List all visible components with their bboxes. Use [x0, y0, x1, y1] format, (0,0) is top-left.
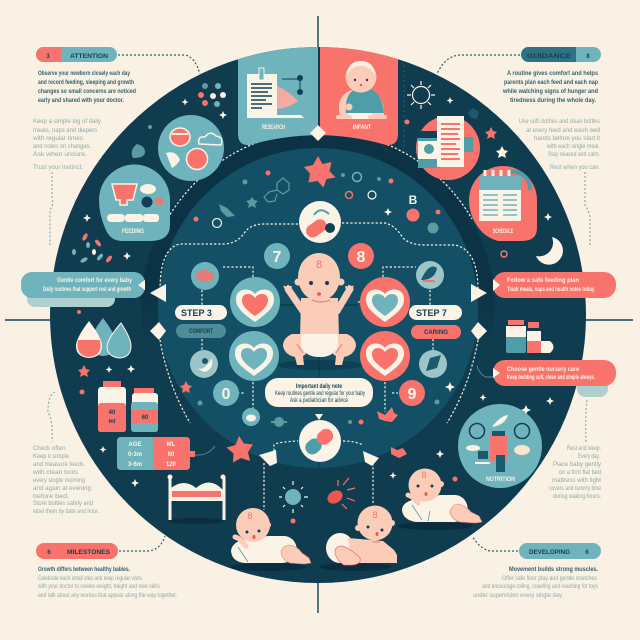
pill header: top right: 8 [586, 54, 590, 60]
small icon: coral lower mark [391, 447, 407, 458]
callout: center note: Keep routines gentle and regular for your baby [275, 391, 365, 397]
caption: baby: INFANT [353, 125, 371, 131]
caption: calendar: SCHEDULE [493, 229, 513, 235]
text block: top right: while watching signs of hunger and [502, 88, 598, 95]
step number 8: 8 [357, 249, 366, 266]
side pill: left teal: Daily routines that support rest and growth [43, 287, 131, 293]
table: two columns: 0-3m [128, 452, 142, 458]
text block: top right: Stay relaxed and calm. [548, 152, 600, 158]
text block: lower right: covers and tummy time [549, 486, 602, 492]
connector: inner dashed tree [160, 223, 478, 290]
text block: top left [32, 70, 136, 171]
small icon: upper right [416, 261, 444, 289]
heart circle: lower right [360, 331, 410, 381]
icon: document [247, 68, 304, 118]
pill: step right [409, 305, 462, 320]
small icon: bottom pacifier [271, 417, 287, 427]
side pill: left teal: Gentle comfort for every baby [57, 278, 133, 284]
baby crawling: center: 8 [372, 510, 378, 520]
text block: lower left: Keep it simple [33, 454, 70, 460]
caption: food: FEEDING [122, 229, 144, 235]
text block: top right: A routine gives comfort and helps [507, 70, 598, 77]
pill header: bottom left: 6 [47, 550, 51, 556]
heart circle: upper left [230, 277, 280, 327]
icon circle: top pacifier [299, 201, 341, 243]
panel: teal food blob [99, 164, 170, 241]
step number 0: 0 [222, 386, 231, 403]
icon: milk bottle right [131, 388, 158, 432]
pill header: top left: ATTENTION [70, 54, 108, 60]
side pill: right coral upper: Follow a safe feeding plan [507, 278, 579, 284]
small icon: lower right [419, 350, 447, 378]
small icon: lower left [190, 350, 218, 378]
diamond: top node [310, 125, 326, 141]
table: two columns: AGE [128, 442, 142, 448]
text block: top left: early and shared with your doctor. [38, 97, 124, 104]
icon: sitting baby [338, 61, 385, 119]
text block: top right: parents plan each feed and each nap [504, 79, 598, 86]
pill header: bottom left [36, 543, 118, 559]
baby lying: right: 8 [421, 470, 427, 480]
arrow: right upper [471, 284, 487, 302]
text block: top left: and notes on changes. [33, 144, 91, 150]
icon: rattle [325, 478, 355, 509]
text block: lower right: mattress with light [552, 478, 601, 484]
text block: top left: and record feeding, sleeping and growth [38, 79, 134, 86]
icon: milk bottle left: 40 [109, 410, 116, 416]
text block: top right: Use soft clothes and clean bottles [519, 119, 600, 125]
caption: supplement: NUTRITION [486, 477, 515, 483]
text block: top right: hands before you start it [534, 136, 600, 142]
table: two columns: 120 [166, 462, 177, 468]
star: top coral badge [304, 156, 336, 188]
icon: milk bottle left: ml [108, 419, 116, 425]
text block: top left: Ask when unsure. [33, 152, 87, 158]
callout: center note [265, 378, 373, 407]
text block: top left: with regular times [32, 136, 83, 142]
baby lying: right [397, 468, 482, 530]
decorations: dots and stars [72, 83, 554, 524]
callout: center note: Important daily note [296, 384, 343, 390]
side pill: right coral lower: Keep bedding soft, clean and simple always. [507, 375, 595, 381]
text block: top left: meals, naps and diapers [33, 128, 97, 134]
text block: lower right [549, 446, 602, 500]
text block: top left: Observe your newborn closely each day [38, 70, 130, 77]
arrow: bottom left [259, 450, 277, 466]
icon: printed list [437, 116, 473, 167]
icon: right bottles [506, 320, 554, 353]
small icon: bottom right coral mark [377, 407, 398, 422]
main dark circle [50, 47, 586, 583]
pill: step left [175, 305, 227, 320]
center baby [278, 253, 362, 370]
caption: document: RESEARCH [262, 125, 285, 131]
side pill: right coral upper: Track meals, naps and health notes today. [507, 287, 595, 293]
side pill: right coral lower: Choose gentle nursery care [507, 367, 580, 373]
icon: teal sun [279, 481, 308, 513]
side pill: right coral lower [477, 360, 616, 397]
text block: lower left: Store bottles safely and [33, 501, 93, 507]
text block: bottom left [37, 566, 177, 599]
text block: lower right: Every day. [578, 454, 600, 460]
small icon: bottom left drop [242, 408, 260, 426]
text block: lower left: with clean tools [32, 470, 78, 476]
panel: coral calendar blob [469, 166, 537, 241]
text block: bottom left: Celebrate each small step and keep regular visits [38, 576, 142, 582]
circle: coral formula and list [416, 116, 480, 180]
icon: calendar [479, 170, 521, 221]
text block: lower right: Place baby gently [553, 462, 601, 468]
step number 7: 7 [273, 249, 282, 266]
text block: top right: Rest when you can. [550, 165, 600, 171]
pill header: bottom left: MILESTONES [67, 550, 110, 556]
heart circle: upper right [360, 277, 410, 327]
table: two columns: 3-6m [128, 462, 142, 468]
baby crawling: center [319, 506, 397, 571]
arrow: left lower [150, 322, 166, 340]
icon: moon [536, 237, 563, 265]
step number 0 [213, 380, 239, 406]
icon: milk bottle right: 60 [142, 415, 149, 421]
table: two columns: ML [167, 442, 176, 448]
text block: bottom right [473, 566, 598, 599]
center baby: 8 [316, 259, 322, 271]
text block: bottom left: with your doctor to review weight, height and new skills [37, 584, 160, 590]
pill: teal label left: COMFORT [189, 329, 213, 335]
step number 8 [348, 243, 374, 269]
step number 9: 9 [408, 386, 417, 403]
text block: bottom left: Growth differs between healthy babies. [38, 566, 130, 573]
circle: dishes [158, 115, 224, 181]
icon: droplets [76, 318, 131, 358]
pill header: top left: 3 [46, 54, 50, 60]
text block: top right: tiredness during the whole day. [510, 97, 596, 104]
callout: center note: Ask a pediatrician for advice [290, 398, 349, 404]
icon: crib [168, 474, 226, 524]
text block: lower left: every single morning [33, 478, 85, 484]
arrow: bottom right [363, 451, 379, 466]
panel: top right coral baby [320, 40, 398, 145]
text block: lower right: during waking hours. [553, 494, 601, 500]
table: two columns: 60 [168, 452, 175, 458]
icon: milk bottle left [98, 381, 126, 432]
small icon: upper left [191, 262, 219, 290]
pill: teal label left [176, 324, 226, 338]
text block: lower left: and again at evening [33, 486, 91, 492]
panel: top left teal document [238, 40, 318, 145]
pill: coral label right [411, 325, 461, 339]
text block: top right: at every feed and wash well [526, 128, 600, 134]
pill: coral label right: CARING [424, 330, 448, 336]
pill header: bottom right: 6 [585, 550, 589, 556]
icon circle: bottom pill [299, 420, 341, 462]
text block: lower left: before bed. [33, 494, 69, 500]
dashed connector: lower right [586, 400, 587, 442]
pill header: top left [36, 47, 117, 62]
text block: bottom left: and talk about any worries that appear along the way together. [38, 593, 177, 599]
text block: bottom right: Offer safe floor play and gentle stretches [502, 576, 597, 582]
pill header: bottom right: DEVELOPING [529, 550, 570, 556]
text block: top left: Trust your instinct. [33, 165, 83, 171]
text block: bottom right: under supervision every single day. [473, 593, 563, 599]
heart circle: lower left [229, 331, 279, 381]
baby lying: left: 8 [247, 511, 253, 521]
pill: step left: STEP 3 [181, 308, 212, 318]
pill header: top right: GUIDANCE [527, 54, 571, 60]
text block: lower left [32, 446, 99, 515]
arrow: right lower [471, 322, 487, 340]
text block: lower right: on a firm flat bed [559, 470, 601, 476]
text block: lower left: label them by date and hour. [33, 509, 99, 515]
text block: top right: with each single meal. [546, 144, 600, 150]
text block: lower right: Rest and sleep. [567, 446, 601, 452]
icon: formula tin [418, 131, 440, 168]
star: bottom coral badge [226, 436, 253, 462]
pill header: bottom right [519, 543, 601, 559]
pill header: top right [521, 47, 601, 62]
text block: top left: Keep a simple log of daily [33, 119, 101, 125]
arrow: left upper [150, 284, 166, 302]
text block: top right [502, 70, 600, 171]
text block: bottom right: and encourage rolling, crawling and reaching for toys [482, 584, 598, 590]
arrow: center down [315, 414, 323, 420]
text block: top left: changes so small concerns are noticed [38, 88, 136, 95]
text letter: B: B [409, 193, 418, 207]
side pill: left teal [21, 272, 145, 307]
pill: step right: STEP 7 [416, 308, 447, 318]
side pill: right coral upper [493, 272, 616, 298]
step number 9 [399, 380, 425, 406]
text block: lower left: and measure feeds [33, 462, 84, 468]
table: two columns [117, 437, 215, 470]
icon: sun outline [407, 81, 435, 109]
step number 7 [264, 243, 290, 269]
circle: teal supplement [458, 404, 542, 488]
baby lying: left [230, 508, 311, 571]
text block: lower left: Check often. [33, 446, 67, 452]
dashed connector: lower left [48, 392, 55, 442]
text block: bottom right: Movement builds strong muscles. [509, 566, 598, 573]
